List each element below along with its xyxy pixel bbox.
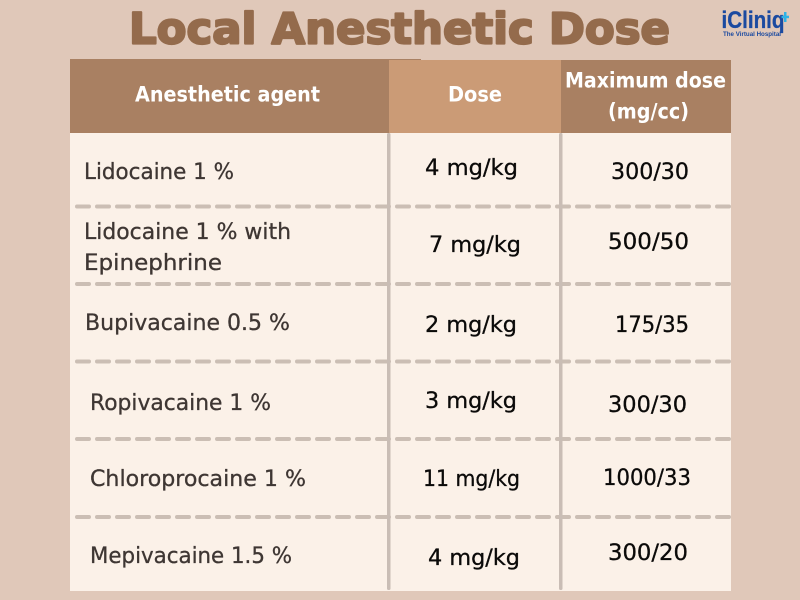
row: Lidocaine 1 % [84,156,689,185]
row: Lidocaine 1 % with Epinephrine [84,220,689,276]
header: anesthetic agent [70,59,421,133]
row: Lidocaine 1 % with Epinephrine: Epinephrine [84,251,222,276]
row: Lidocaine 1 %: Lidocaine 1 % [84,160,234,185]
row: Chloroprocaine 1 %: 11 mg/kg [423,467,520,492]
row: Lidocaine 1 % with Epinephrine: Lidocaine 1 % with [84,220,291,245]
row: Bupivacaine 0.5 %: 2 mg/kg [425,313,517,338]
header: anesthetic agent: Anesthetic agent [135,82,320,106]
table panel [70,59,731,591]
row: Chloroprocaine 1 %: 1000/33 [603,466,691,491]
row: Bupivacaine 0.5 %: Bupivacaine 0.5 % [85,311,290,336]
row: Lidocaine 1 %: 4 mg/kg [425,156,518,181]
header: maximum dose: Maximum dose [565,68,726,92]
logo: iCliniq: The Virtual Hospital [723,32,781,38]
row: Mepivacaine 1.5 %: 4 mg/kg [428,546,520,571]
header: dose: Dose [448,82,502,106]
header: maximum dose: (mg/cc) [608,100,689,124]
row: Ropivacaine 1 % [90,389,687,418]
row: Ropivacaine 1 %: 300/30 [608,393,687,418]
header: dose [389,60,561,133]
row: Chloroprocaine 1 % [90,466,691,492]
row: Bupivacaine 0.5 % [85,311,689,338]
row: Ropivacaine 1 %: 3 mg/kg [425,389,517,414]
header: maximum dose [561,60,731,133]
row: Mepivacaine 1.5 %: Mepivacaine 1.5 % [90,544,292,569]
title: Local Anesthetic Dose [129,4,670,54]
row: Lidocaine 1 % with Epinephrine: 500/50 [608,230,689,255]
row: Lidocaine 1 %: 300/30 [611,160,689,185]
row: Ropivacaine 1 %: Ropivacaine 1 % [90,391,271,416]
logo: iCliniq: iCliniq [722,7,784,34]
row: Lidocaine 1 % with Epinephrine: 7 mg/kg [429,233,521,258]
row: Bupivacaine 0.5 %: 175/35 [615,313,689,338]
row: Mepivacaine 1.5 % [90,541,688,571]
row: Mepivacaine 1.5 %: 300/20 [608,541,688,566]
row: Chloroprocaine 1 %: Chloroprocaine 1 % [90,467,306,492]
